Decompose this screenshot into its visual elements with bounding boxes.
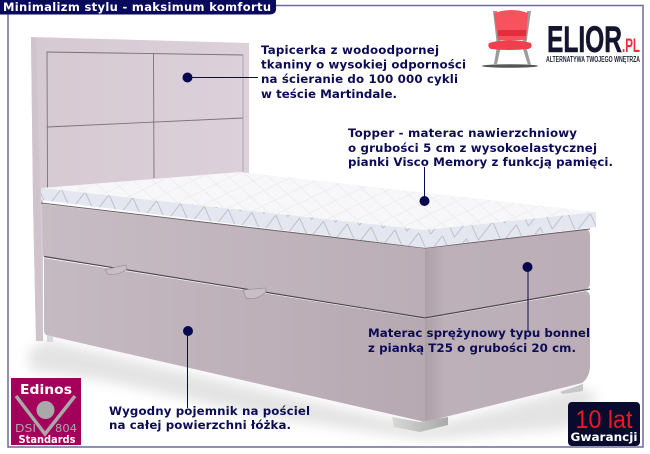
badge: Edinos DSI 804 Standards: 804 (55, 423, 77, 435)
callout: topper: o grubości 5 cm z wysokoelastycznej (348, 141, 597, 155)
headboard (31, 37, 249, 341)
callout: bonnel mattress: Materac sprężynowy typu bonnel (368, 326, 590, 340)
callout: topper: Topper - materac nawierzchniowy (348, 126, 577, 140)
callout: storage (109, 326, 310, 432)
corner shading (424, 248, 426, 422)
title: Minimalizm stylu - maksimum komfortu (3, 0, 271, 14)
bed illustration (28, 37, 598, 440)
strap handles (105, 265, 266, 299)
lower box (44, 258, 590, 422)
badge: Edinos DSI 804 Standards: Edinos (20, 382, 72, 398)
callout: headboard upholstery: Tapicerka z wodoodpornej (261, 43, 439, 57)
floor shadow (28, 340, 598, 440)
callout: headboard upholstery: w teście Martindale. (261, 87, 397, 101)
badge: 10 lat warranty: Gwarancji (570, 430, 638, 444)
callout: topper (348, 126, 613, 206)
callout: bonnel mattress (368, 262, 590, 355)
box seam (44, 256, 590, 318)
bed feet (47, 335, 583, 432)
headboard panel seams (46, 52, 243, 188)
callout: topper: pianki Visco Memory z funkcją pamięci. (348, 155, 613, 169)
callout: storage: na całej powierzchni łóżka. (109, 418, 291, 432)
callout: headboard upholstery: tkaniny o wysokiej odporności (261, 58, 466, 72)
badge: Edinos DSI 804 Standards: Standards (18, 434, 76, 446)
icon: red chair (482, 10, 538, 68)
callout: storage: Wygodny pojemnik na pościel (109, 404, 310, 418)
logo: Elior (482, 10, 640, 68)
badge: Edinos DSI 804 Standards: DSI (15, 423, 36, 435)
topper mattress (41, 172, 596, 248)
badge: Edinos DSI 804 Standards (11, 378, 81, 446)
callout: bonnel mattress: z pianką T25 o grubości 20 cm. (368, 341, 576, 355)
upper box (42, 204, 590, 318)
badge: 10 lat warranty: 10 lat (576, 406, 633, 434)
headboard side strip (31, 37, 43, 341)
callout: headboard upholstery: na ścieranie do 100 000 cykli (261, 72, 458, 86)
callout: headboard upholstery (182, 43, 466, 101)
badge: 10 lat warranty (568, 402, 640, 446)
